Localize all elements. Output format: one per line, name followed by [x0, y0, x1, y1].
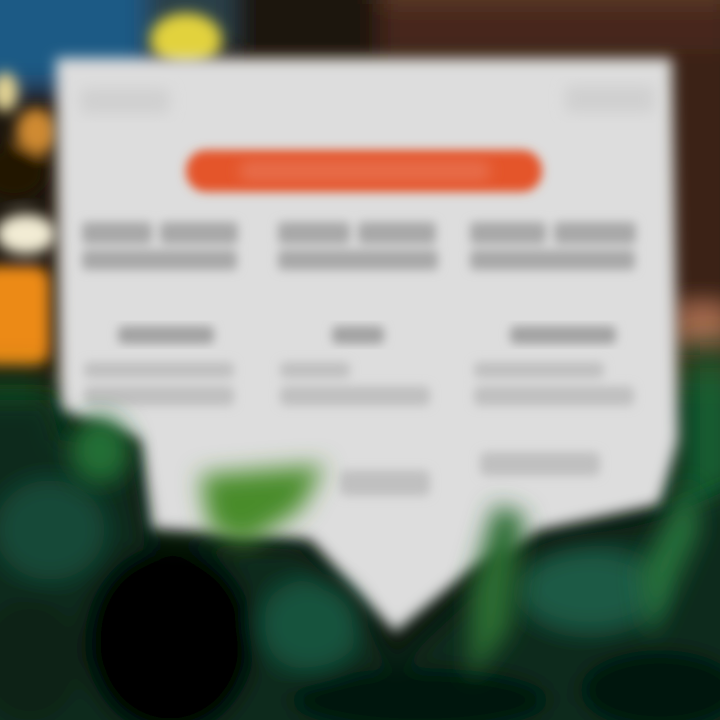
callout: red title pill — [186, 150, 542, 192]
left side flowers — [0, 72, 56, 366]
text block: column subheads — [118, 326, 616, 344]
heading: top header smudges — [80, 85, 655, 114]
icon: yellow ball — [150, 13, 222, 67]
panel: main card — [56, 58, 678, 632]
text block: column bodies — [84, 362, 634, 496]
text block: three column headline smudges — [82, 222, 636, 270]
green foliage back — [0, 355, 720, 595]
foliage: leaves in front — [0, 400, 720, 720]
